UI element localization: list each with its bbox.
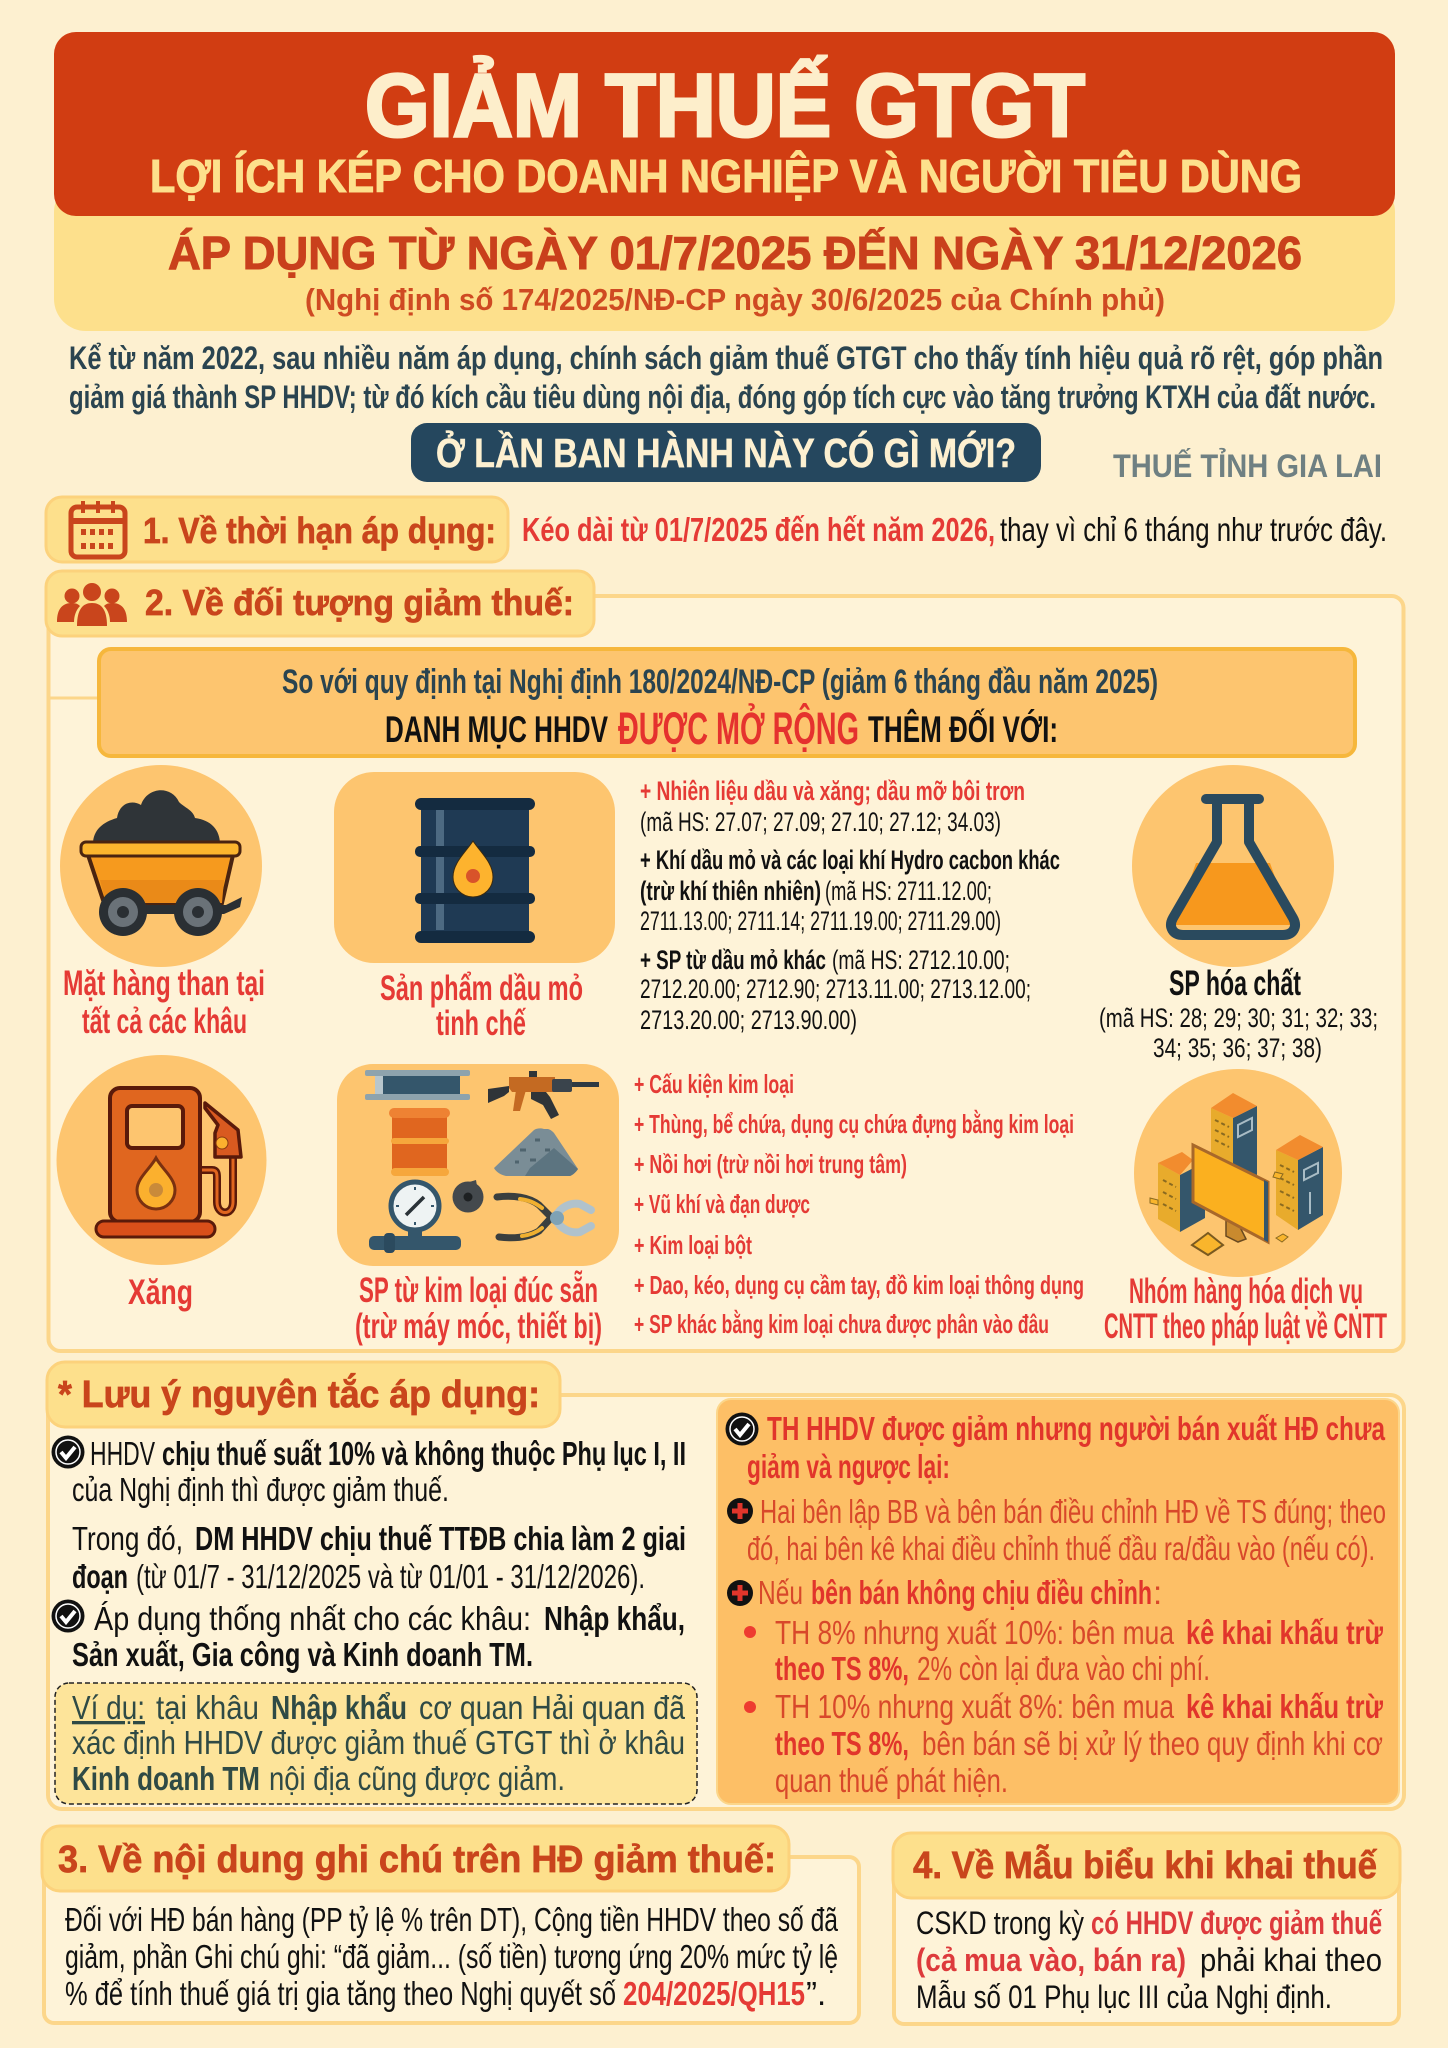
- example box: xác định HHDV được giảm thuế GTGT thì ở khâu: [72, 1724, 685, 1761]
- label: SP từ kim loại đúc sẵn: [359, 1270, 598, 1310]
- remedy 2: :: [1153, 1574, 1162, 1611]
- list: metal products: + Nồi hơi (trừ nồi hơi trung tâm): [634, 1149, 907, 1179]
- icon: flask: [1171, 794, 1295, 935]
- list: petroleum products: (mã HS: 2712.10.00;: [832, 945, 1010, 975]
- rule 1: chịu thuế suất 10% và không thuộc Phụ lục I, II: [162, 1435, 686, 1472]
- rule 1: đoạn: [72, 1558, 128, 1595]
- intro text: [69, 340, 1383, 415]
- case: 8 percent: theo TS 8%,: [775, 1650, 909, 1687]
- list: petroleum products: + SP từ dầu mỏ khác: [640, 945, 826, 975]
- section 2: panel: [46, 571, 1404, 1351]
- label: SP hóa chất: [1169, 964, 1301, 1003]
- section 4: body: Mẫu số 01 Phụ lục III của Nghị định.: [916, 1979, 1332, 2015]
- case: 8 percent: [744, 1614, 1383, 1687]
- section 4: body: (cả mua vào, bán ra): [916, 1942, 1186, 1978]
- heading: 1. Về thời hạn áp dụng:: [143, 510, 496, 551]
- list: metal products: + Thùng, bể chứa, dụng cụ chứa đựng bằng kim loại: [634, 1109, 1074, 1139]
- case: 8 percent: 2% còn lại đưa vào chi phí.: [917, 1650, 1210, 1687]
- rule 1: (từ 01/7 - 31/12/2025 và từ 01/01 - 31/12/2026).: [136, 1558, 645, 1595]
- item: coal: tất cả các khâu: [82, 1002, 247, 1041]
- icon: calendar: [71, 501, 125, 557]
- item: IT goods: [1104, 1069, 1387, 1346]
- section 4: heading pill: [893, 1833, 1400, 1898]
- section 1: heading pill: [46, 497, 508, 562]
- section 3: heading pill: [42, 1826, 789, 1891]
- banner: expanded list: [99, 649, 1355, 756]
- section 3: body: [65, 1901, 838, 2012]
- banner: expanded list: ĐƯỢC MỞ RỘNG: [618, 703, 859, 754]
- example box: Kinh doanh TM: [72, 1760, 260, 1797]
- example box: Ví dụ:: [72, 1689, 145, 1726]
- rule 2: Áp dụng thống nhất cho các khâu:: [94, 1600, 531, 1637]
- case: 10 percent: kê khai khấu trừ: [1186, 1688, 1383, 1725]
- case: 8 percent: TH 8% nhưng xuất 10%: bên mua: [775, 1614, 1175, 1651]
- item: chemicals: 34; 35; 36; 37; 38): [1153, 1033, 1322, 1063]
- list: petroleum products: (mã HS: 2711.12.00;: [825, 876, 992, 906]
- section 3: body: % để tính thuế giá trị gia tăng theo Nghị quyết số: [65, 1975, 616, 2012]
- rule 1: [72, 1435, 686, 1595]
- question pill: [411, 423, 1041, 482]
- decree reference: (Nghị định số 174/2025/NĐ-CP ngày 30/6/2025 của Chính phủ): [305, 282, 1165, 317]
- section 1: content: Kéo dài từ 01/7/2025 đến hết năm 2026,: [522, 511, 995, 548]
- case: 10 percent: theo TS 8%,: [775, 1725, 909, 1762]
- rule 1: HHDV: [90, 1435, 155, 1472]
- case: 8 percent: kê khai khấu trừ: [1186, 1614, 1383, 1651]
- icon: metal powder: [494, 1128, 578, 1176]
- icon: check: [726, 1412, 758, 1446]
- rule 2: Sản xuất, Gia công và Kinh doanh TM.: [72, 1636, 533, 1673]
- item: metal products: [337, 1064, 619, 1346]
- section 2: heading pill: [46, 571, 594, 636]
- case: 10 percent: quan thuế phát hiện.: [775, 1762, 1008, 1799]
- item: chemicals: [1099, 765, 1378, 1063]
- list: petroleum products: [640, 776, 1060, 1035]
- example box: [55, 1683, 697, 1804]
- notes: heading pill: * Lưu ý nguyên tắc áp dụng:: [58, 1372, 540, 1416]
- example box: cơ quan Hải quan đã: [419, 1689, 686, 1726]
- icon: plus: [727, 1580, 753, 1606]
- list: metal products: + Kim loại bột: [634, 1230, 752, 1260]
- list: petroleum products: 2712.20.00; 2712.90; 2713.11.00; 2713.12.00;: [640, 974, 1031, 1004]
- source label: THUẾ TỈNH GIA LAI: [1113, 448, 1382, 484]
- icon: gauge: [369, 1182, 461, 1253]
- case heading: giảm và ngược lại:: [747, 1448, 950, 1485]
- list: metal products: + Cấu kiện kim loại: [634, 1069, 794, 1099]
- orange box: seller invoice cases: [717, 1399, 1399, 1804]
- rule 2: Nhập khẩu,: [544, 1600, 685, 1637]
- case heading: [747, 1410, 1385, 1485]
- title: GIẢM THUẾ GTGT: [365, 55, 1085, 155]
- case: 10 percent: [744, 1688, 1383, 1799]
- section 4: body: CSKD trong kỳ: [916, 1905, 1084, 1941]
- example box: nội địa cũng được giảm.: [269, 1760, 565, 1797]
- effective date: ÁP DỤNG TỪ NGÀY 01/7/2025 ĐẾN NGÀY 31/12/2026: [168, 227, 1302, 279]
- heading: 2. Về đối tượng giảm thuế:: [145, 582, 574, 623]
- remedy 2: Nếu: [758, 1574, 803, 1611]
- remedy 2: [758, 1574, 1162, 1611]
- list: metal products: + SP khác bằng kim loại chưa được phân vào đâu: [634, 1309, 1049, 1339]
- icon: rifle: [488, 1071, 599, 1119]
- icon: drum: [389, 1108, 450, 1176]
- example box: Nhập khẩu: [271, 1689, 407, 1726]
- list: metal products: + Vũ khí và đạn dược: [634, 1189, 810, 1219]
- icon: check: [52, 1600, 84, 1632]
- header: date band: [54, 180, 1395, 331]
- section 3: heading pill: 3. Về nội dung ghi chú trên HĐ giảm thuế:: [58, 1839, 776, 1881]
- label: Sản phẩm dầu mỏ: [380, 969, 583, 1008]
- item: metal products: (trừ máy móc, thiết bị): [355, 1307, 602, 1346]
- list: petroleum products: (mã HS: 27.07; 27.09; 27.10; 27.12; 34.03): [640, 807, 1001, 837]
- icon: oil barrel: [415, 798, 535, 943]
- item: gasoline: [56, 1055, 266, 1312]
- section 3: body: ”.: [806, 1975, 826, 2012]
- section 3: body: Đối với HĐ bán hàng (PP tỷ lệ % trên DT), Cộng tiền HHDV theo số đã: [65, 1901, 838, 1938]
- case: 10 percent: TH 10% nhưng xuất 8%: bên mua: [775, 1688, 1175, 1725]
- rule 1: của Nghị định thì được giảm thuế.: [72, 1471, 449, 1508]
- list: petroleum products: 2711.13.00; 2711.14; 2711.19.00; 2711.29.00): [640, 906, 1001, 936]
- item: refined petroleum: tinh chế: [436, 1004, 526, 1043]
- rule 2: [72, 1600, 685, 1673]
- section 3: body: 204/2025/QH15: [623, 1975, 805, 2012]
- item: refined petroleum: [334, 772, 615, 1043]
- list: petroleum products: + Khí dầu mỏ và các loại khí Hydro cacbon khác: [640, 845, 1060, 875]
- icon: pliers: [497, 1196, 591, 1238]
- section 3: panel: [42, 1826, 859, 2023]
- question pill: Ở LẦN BAN HÀNH NÀY CÓ GÌ MỚI?: [436, 430, 1016, 476]
- list: metal products: + Dao, kéo, dụng cụ cầm tay, đồ kim loại thông dụng: [634, 1270, 1084, 1300]
- list: petroleum products: (trừ khí thiên nhiên): [640, 876, 821, 906]
- notes: panel: [47, 1362, 1404, 1809]
- icon: coal cart: [81, 790, 242, 936]
- icon: check: [52, 1436, 84, 1468]
- list: metal products: [634, 1069, 1084, 1339]
- label: Mặt hàng than tại: [63, 964, 265, 1003]
- icon: metal ball: [452, 1180, 484, 1212]
- rule 1: DM HHDV chịu thuế TTĐB chia làm 2 giai: [195, 1520, 686, 1557]
- section 4: panel: [893, 1833, 1400, 2024]
- example box: tại khâu: [156, 1689, 259, 1726]
- banner: expanded list: DANH MỤC HHDV: [385, 709, 608, 750]
- banner: expanded list: THÊM ĐỐI VỚI:: [868, 708, 1058, 750]
- subtitle: LỢI ÍCH KÉP CHO DOANH NGHIỆP VÀ NGƯỜI TIÊU DÙNG: [150, 150, 1302, 202]
- item: coal: [60, 765, 265, 1041]
- notes: heading pill: [47, 1362, 560, 1427]
- icon: fuel pump: [96, 1088, 241, 1237]
- remedy 2: bên bán không chịu điều chỉnh: [811, 1574, 1152, 1611]
- section 4: body: [916, 1905, 1382, 2015]
- header: title banner: [54, 32, 1395, 216]
- section 3: body: giảm, phần Ghi chú ghi: “đã giảm... (số tiền) tương ứng 20% mức tỷ lệ: [65, 1938, 838, 1975]
- section 4: heading pill: 4. Về Mẫu biểu khi khai thuế: [913, 1843, 1378, 1887]
- icon: plus: [727, 1498, 753, 1524]
- section 4: body: phải khai theo: [1200, 1942, 1382, 1978]
- list: petroleum products: 2713.20.00; 2713.90.00): [640, 1005, 857, 1035]
- icon: people: [57, 583, 127, 626]
- remedy 1: [747, 1493, 1386, 1567]
- rule 1: Trong đó,: [72, 1520, 183, 1557]
- icon: computers and servers: [1150, 1093, 1323, 1255]
- label: Xăng: [128, 1273, 193, 1312]
- icon: I-beam: [365, 1070, 470, 1100]
- list: petroleum products: + Nhiên liệu dầu và xăng; dầu mỡ bôi trơn: [640, 776, 1025, 806]
